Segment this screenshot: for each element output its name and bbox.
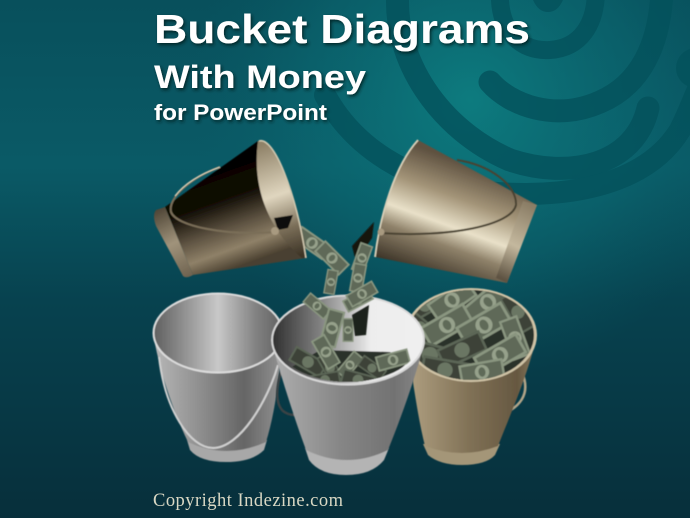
bucket: tan full of money [411,287,538,466]
bucket handle [159,357,278,448]
money pile [414,290,533,380]
title block [154,6,530,125]
bucket handle [171,167,275,233]
bucket: tilted left pouring [154,140,307,277]
bucket handle [277,368,300,415]
copyright: Copyright Indezine.com [153,491,344,511]
bucket: silver empty left [153,293,283,462]
bucket handle [380,160,516,234]
bucket handle [511,368,525,410]
background spiral [325,0,690,194]
tagline: for PowerPoint [154,100,328,125]
money pile [288,346,411,382]
subtitle: With Money [154,59,366,95]
falling money [273,214,379,370]
bucket: tilted right pouring [375,140,537,283]
bucket: silver middle catching money [271,295,425,475]
title: Bucket Diagrams [154,6,530,52]
